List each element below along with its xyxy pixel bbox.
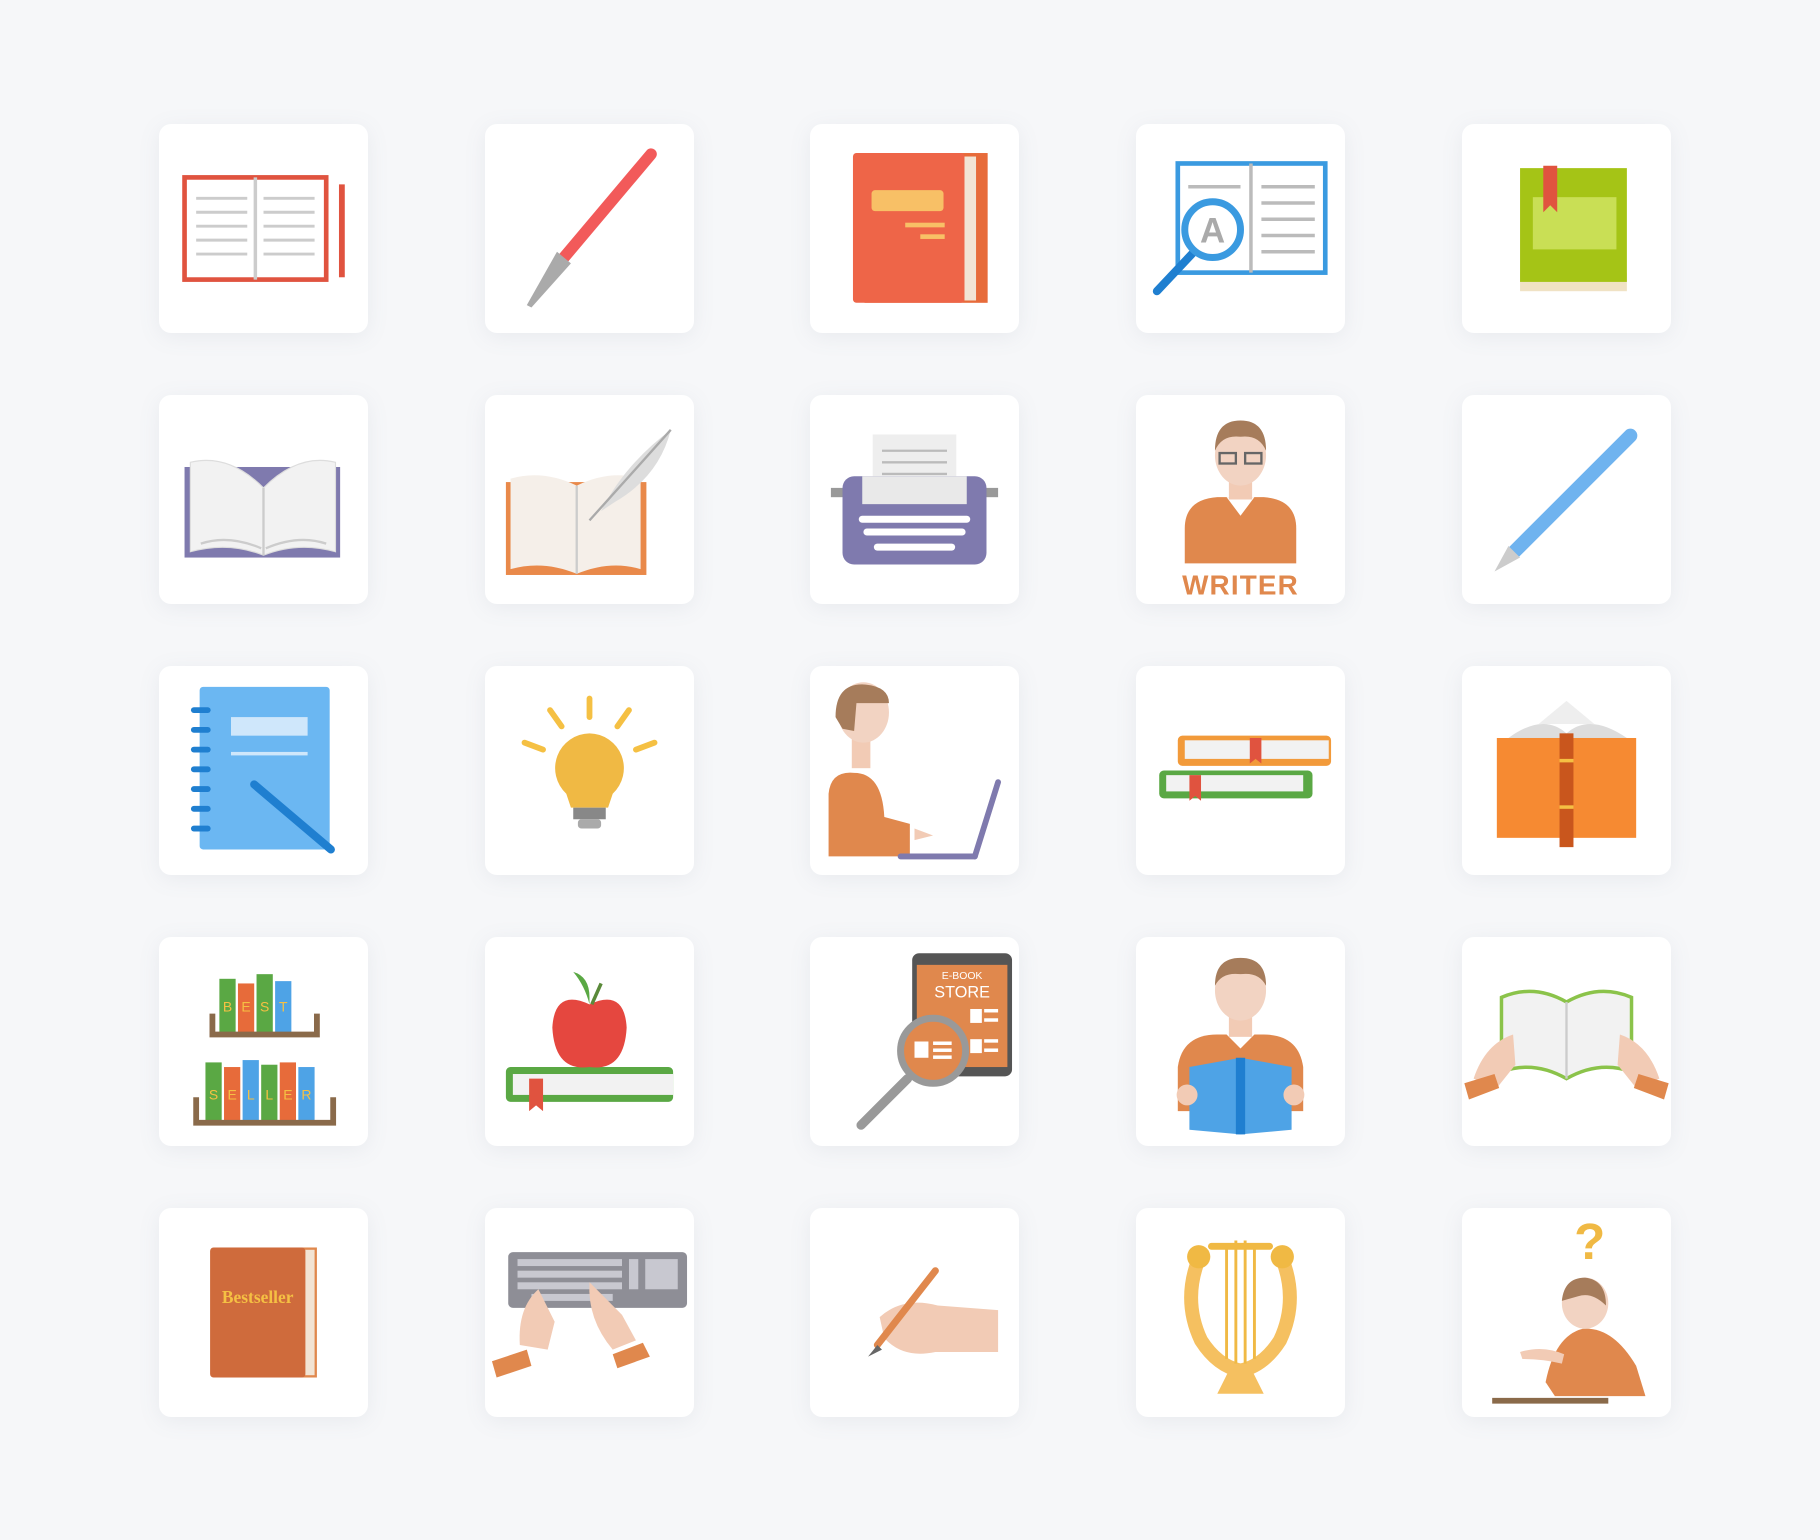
icon: ebook store <box>861 953 1012 1125</box>
card: person with laptop <box>810 666 1019 875</box>
icon: book shelves: L <box>265 1087 273 1103</box>
icon: book shelves: T <box>279 998 288 1014</box>
icon: writer person: WRITER <box>1182 570 1299 601</box>
card: orange book <box>810 124 1019 333</box>
card: stacked books <box>1136 666 1345 875</box>
card: hands holding book <box>1462 937 1671 1146</box>
card: typewriter <box>810 395 1019 604</box>
icon: blue pencil <box>1495 436 1630 571</box>
icon: book shelves <box>196 974 333 1123</box>
icon: keyboard hands <box>492 1252 687 1378</box>
card: writer <box>1136 395 1345 604</box>
icon: book shelves: L <box>247 1087 255 1103</box>
card: lightbulb <box>485 666 694 875</box>
card: apple on book <box>485 937 694 1146</box>
icon: question person: ? <box>1574 1213 1605 1270</box>
card: thinking person <box>1462 1208 1671 1417</box>
icon: green book <box>1520 166 1627 291</box>
icon: book shelves: E <box>228 1087 237 1103</box>
icon: search book: A <box>1200 211 1225 250</box>
card: ebook store <box>810 937 1019 1146</box>
icon: orange open book <box>1497 701 1636 847</box>
icon: typewriter <box>831 434 998 565</box>
icon: laptop worker <box>829 682 998 856</box>
card: lyre <box>1136 1208 1345 1417</box>
card: keyboard <box>485 1208 694 1417</box>
icon: book shelves: B <box>223 998 232 1014</box>
card: magnifier over book <box>1136 124 1345 333</box>
icon: open red book <box>185 177 345 280</box>
icon: spiral notebook <box>194 687 331 849</box>
icon: lightbulb <box>524 699 655 829</box>
icon: open book in hands <box>1464 991 1669 1100</box>
icon: book and quill <box>506 430 671 575</box>
card: orange open book <box>1462 666 1671 875</box>
card: hand writing <box>810 1208 1019 1417</box>
card: open book with quill <box>485 395 694 604</box>
card: bestseller book <box>159 1208 368 1417</box>
icon: book shelves: S <box>209 1087 218 1103</box>
card: red pen <box>485 124 694 333</box>
card: open book with pencil <box>159 124 368 333</box>
icon: book shelves: E <box>241 998 251 1014</box>
icon: book shelves: E <box>283 1087 293 1103</box>
icon: ebook store: STORE <box>934 983 990 1001</box>
icon: bestseller book <box>210 1247 317 1378</box>
icon: writing hand <box>868 1271 998 1357</box>
icon: open book <box>185 460 340 558</box>
icon: question person <box>1492 1213 1645 1401</box>
icon: book shelves: R <box>301 1087 311 1103</box>
icon: apple and book <box>506 972 673 1111</box>
icon: pen <box>527 154 651 307</box>
card: notebook <box>159 666 368 875</box>
icon: closed book <box>853 153 988 303</box>
icon: bestseller book: Bestseller <box>222 1287 294 1307</box>
card: reader <box>1136 937 1345 1146</box>
card: green book <box>1462 124 1671 333</box>
icon: person reading <box>1177 958 1304 1134</box>
icon: book stack <box>1159 736 1331 801</box>
icon: ebook store: E-BOOK <box>942 971 982 982</box>
icon: lyre <box>1187 1241 1294 1394</box>
card: bestseller shelves <box>159 937 368 1146</box>
icon: writer person <box>1182 421 1299 601</box>
card: blue pencil <box>1462 395 1671 604</box>
icon: book shelves: S <box>260 998 269 1014</box>
card: purple open book <box>159 395 368 604</box>
icon: search book <box>1157 163 1325 291</box>
